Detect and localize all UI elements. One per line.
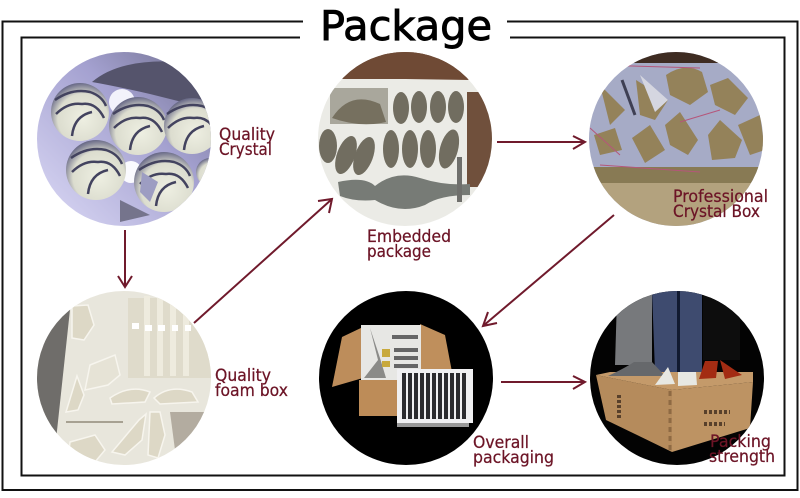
label: quality crystal: Quality [219,125,275,144]
photo: quality foam box [37,291,211,465]
title: Package [320,2,492,50]
label: professional crystal box: Professional [673,187,768,206]
label: overall packaging: Overall [473,433,529,452]
photo: professional crystal box [589,52,765,226]
label: quality foam box [215,366,288,400]
label: packing strength: strength [709,447,775,466]
arrow: crystal box to overall packaging [483,215,614,326]
label: overall packaging: packaging [473,448,554,467]
arrow: crystal to foam box [118,230,132,287]
label: embedded package: package [367,242,431,261]
label: quality foam box: foam box [215,381,288,400]
label: embedded package: Embedded [367,227,451,246]
label: overall packaging [473,433,554,467]
label: packing strength [709,432,775,466]
photo: packing strength [590,291,764,465]
label: embedded package [367,227,451,261]
arrow: embedded package to crystal box [497,136,585,149]
label: packing strength: Packing [710,432,771,451]
label: quality foam box: Quality [215,366,271,385]
photo: quality crystal [37,52,224,226]
arrow: overall packaging to packing strength [501,376,585,389]
label: professional crystal box [673,187,768,221]
arrow: foam box to embedded package [194,199,332,323]
label: quality crystal: Crystal [219,140,272,159]
label: quality crystal [219,125,275,159]
photo: embedded package [318,52,492,226]
label: professional crystal box: Crystal Box [673,202,760,221]
photo: overall packaging [319,291,493,465]
